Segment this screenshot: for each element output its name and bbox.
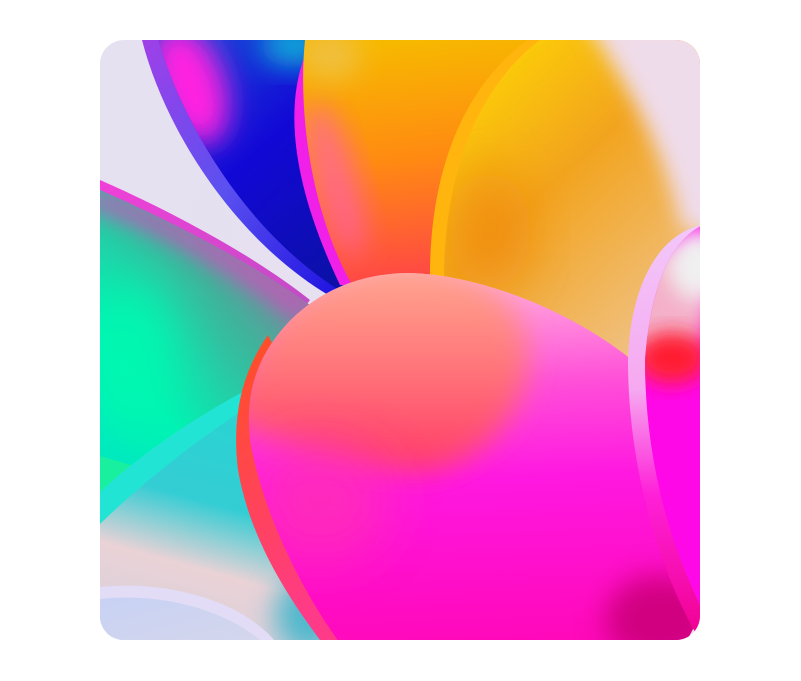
green lower wedge [100, 456, 131, 492]
teal petal fill [100, 414, 292, 640]
orange petal edge [294, 58, 351, 286]
background [100, 40, 700, 640]
green petal fill [100, 190, 309, 466]
teal lower right shade [256, 572, 320, 640]
coral blob [230, 262, 528, 472]
teal petal edge [100, 392, 242, 640]
orange petal fill [303, 40, 528, 282]
yellow petal fill [444, 40, 700, 357]
green petal [100, 180, 310, 492]
lavender bottom petal [100, 586, 274, 640]
pale top right overlay [578, 40, 700, 237]
orange petal [294, 40, 528, 286]
hot pink lower left glow [250, 440, 390, 560]
pink petal edge [236, 335, 338, 640]
pink petal [236, 273, 694, 640]
blue petal fill [158, 40, 342, 288]
right petal fill [645, 226, 700, 605]
yellow petal edge [430, 40, 700, 276]
blue petal edge [142, 40, 345, 296]
teal petal [100, 392, 320, 640]
green petal edge [100, 180, 310, 304]
lavender petal edge [100, 586, 274, 640]
blue petal [142, 40, 344, 294]
right petal [628, 226, 700, 632]
lavender petal fill [100, 597, 260, 640]
yellow petal [430, 40, 700, 357]
right petal edge [628, 226, 700, 632]
pink petal fill [248, 273, 694, 640]
abstract colourful petals artwork [100, 40, 700, 640]
